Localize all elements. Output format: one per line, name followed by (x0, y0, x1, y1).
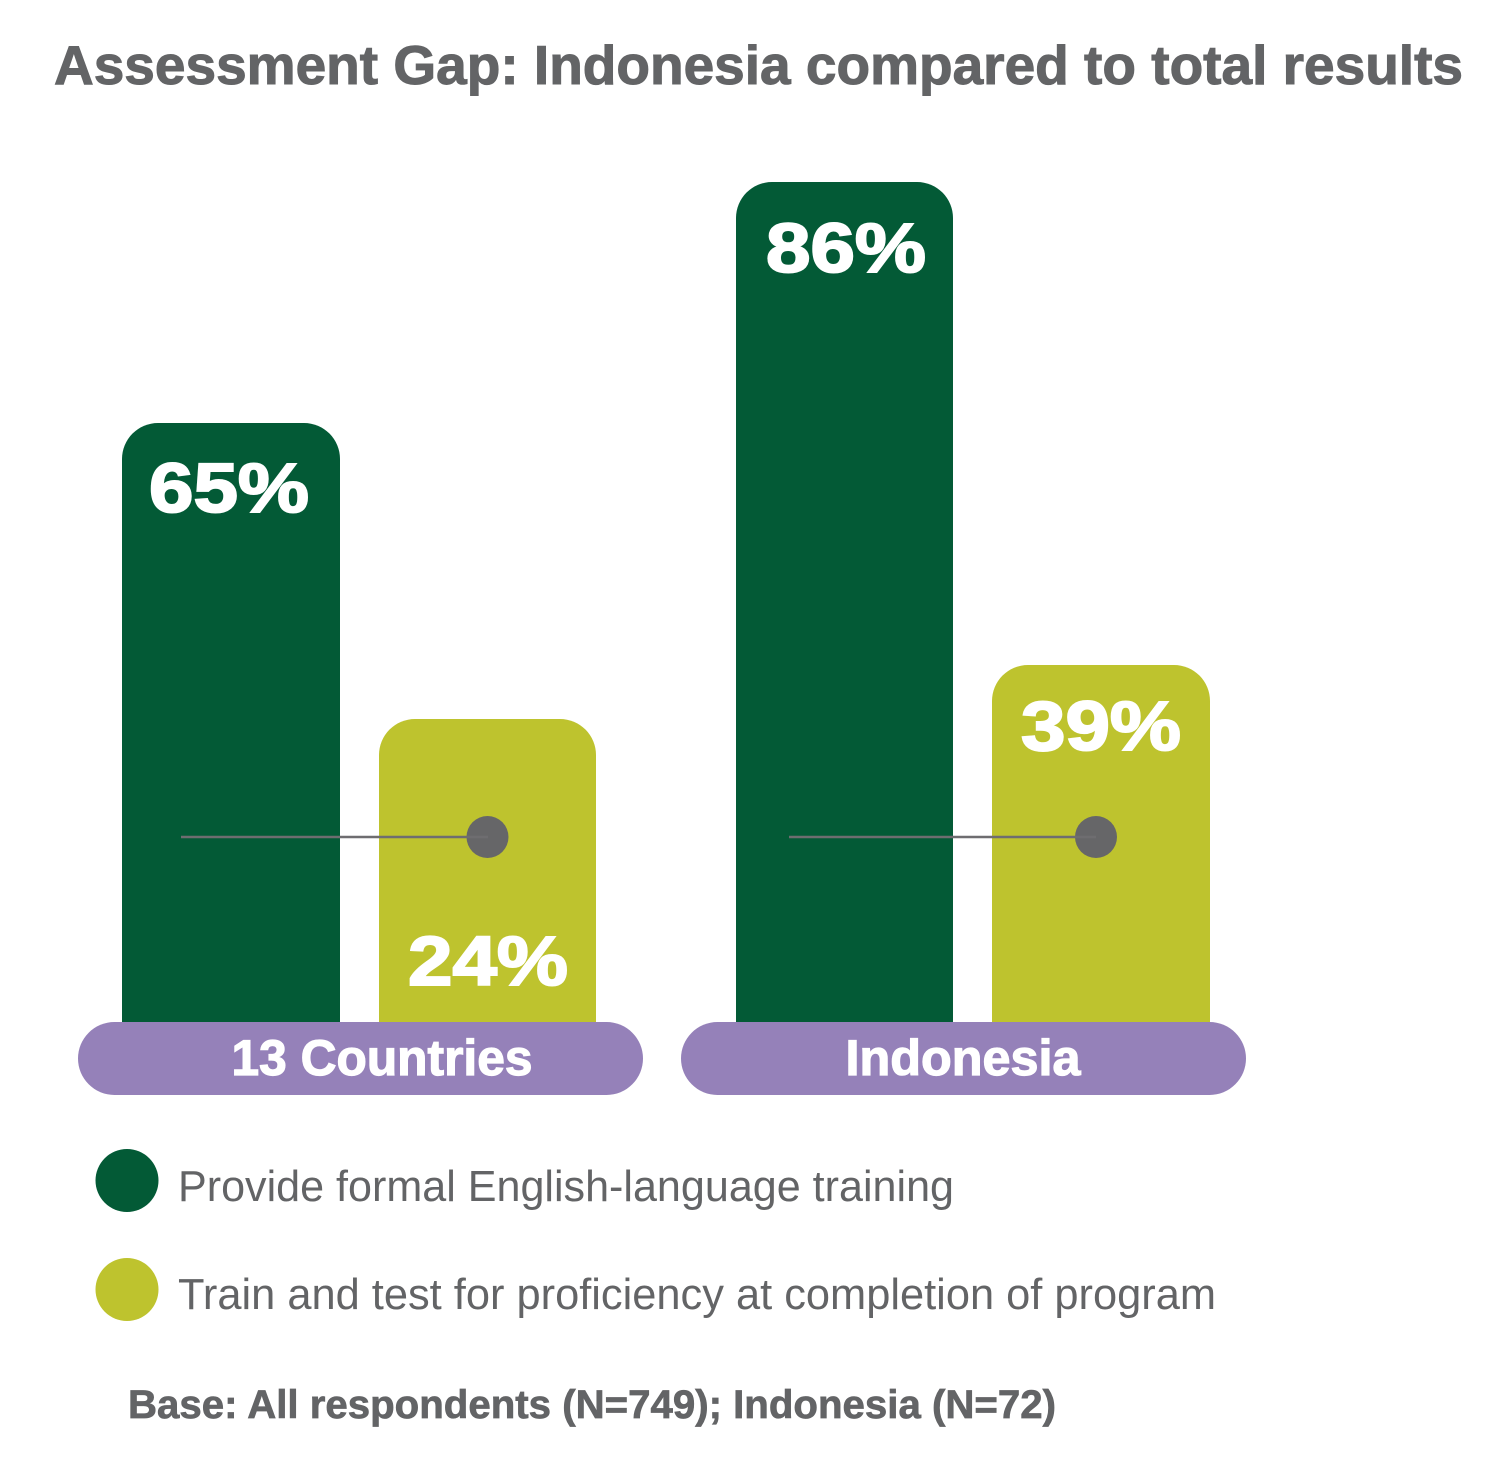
title: Assessment Gap: Indonesia compared to total results (54, 35, 1463, 96)
bar: 13 Countries proficiency 24% (379, 719, 596, 1030)
gap connector: Indonesia (789, 816, 1117, 858)
axis label: 13 Countries: 13 Countries (232, 1030, 532, 1086)
legend item: proficiency testing: Train and test for proficiency at completion of program (178, 1270, 1216, 1319)
axis label: 13 Countries (78, 1022, 643, 1095)
bar: Indonesia formal training 86%: 86% (766, 209, 926, 287)
bar chart (78, 182, 1246, 1095)
gap connector: 13 Countries (181, 816, 508, 858)
axis label: Indonesia: Indonesia (846, 1030, 1082, 1086)
base note: Base: All respondents (N=749); Indonesia (N=72) (128, 1383, 1056, 1427)
legend item: formal training: Provide formal English-language training (178, 1162, 954, 1211)
bar: 13 Countries proficiency 24%: 24% (408, 922, 568, 1000)
bar: Indonesia proficiency 39%: 39% (1021, 687, 1181, 765)
axis label: Indonesia (681, 1022, 1246, 1095)
legend (96, 1149, 1216, 1321)
bar: Indonesia formal training 86% (736, 182, 953, 1030)
bar: 13 Countries formal training 65% (122, 423, 340, 1030)
legend item: formal training (96, 1149, 954, 1212)
bar: 13 Countries formal training 65%: 65% (149, 449, 309, 527)
bar: Indonesia proficiency 39% (992, 665, 1210, 1030)
